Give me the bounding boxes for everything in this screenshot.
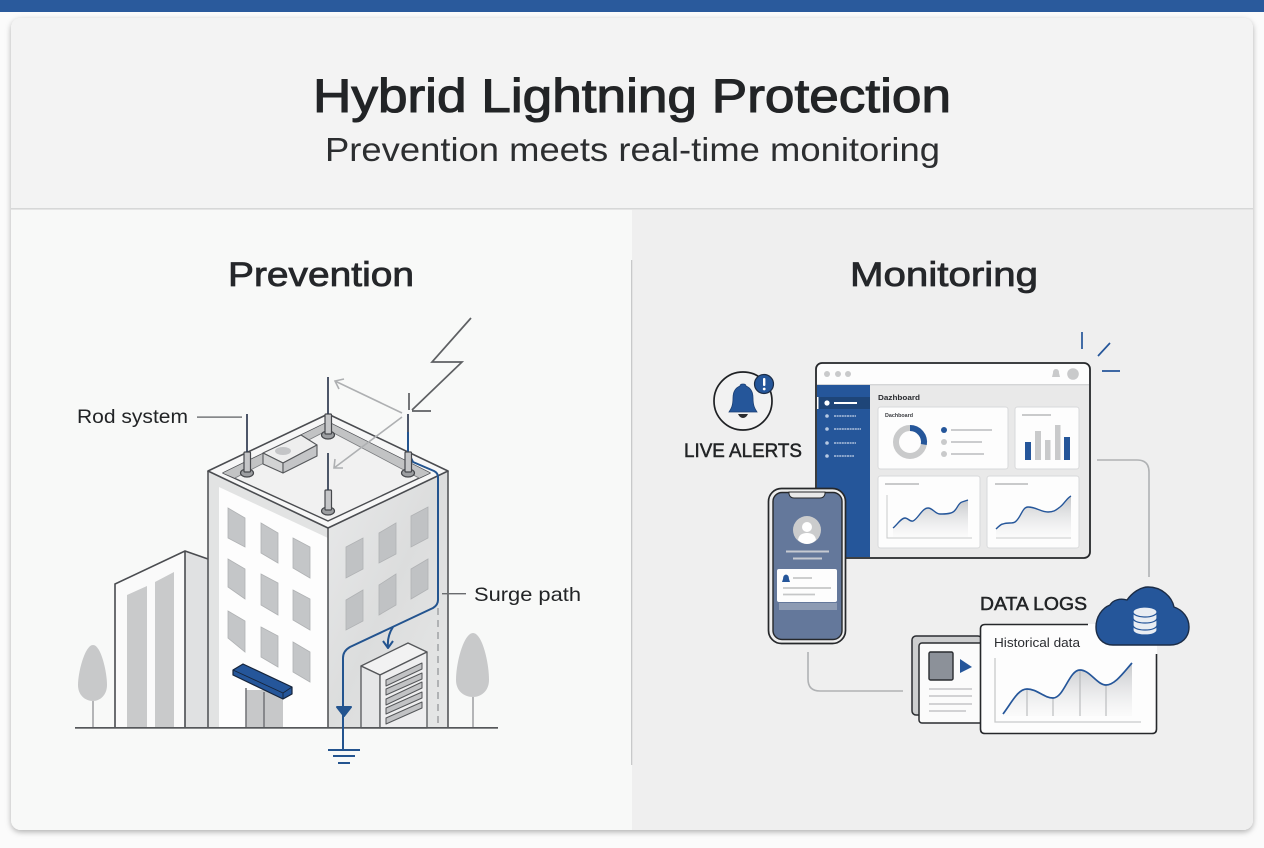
left windows [228,508,310,682]
panel: prevention [12,260,580,830]
dashboard window [816,363,1090,558]
icon: alert bell [714,372,774,430]
avatar [793,516,821,544]
back log sheet [912,636,982,715]
ground symbol [328,750,360,763]
rod [322,453,334,515]
title: Hybrid Lightning Protection [313,69,951,122]
surge path [328,432,438,763]
heading: prevention: Prevention [228,256,414,294]
area chart [995,658,1141,722]
chart card: historical data [980,624,1157,734]
rod [322,377,334,439]
signal ticks [1082,332,1120,371]
connector: dashboard to data logs [1097,460,1149,577]
lightning bolt [409,318,471,411]
left wall [208,471,328,728]
rod with surge connection [402,414,414,477]
deflection arrows [334,379,402,468]
roof [208,414,448,528]
tree right [456,633,489,728]
card: donut summary: Dachboard [885,413,913,419]
main building [208,377,448,728]
wall outlines [208,471,448,728]
phone [768,488,846,644]
right windows [346,507,428,630]
card: bar chart [1015,407,1079,469]
database [1133,607,1157,635]
sidebar [817,385,870,557]
dashed down conductor [437,608,439,728]
hvac unit [361,643,427,728]
awning [233,664,292,699]
header panel [11,77,1253,210]
label: live alerts: LIVE ALERTS [684,441,802,462]
right wall [328,471,448,728]
subtitle: Prevention meets real-time monitoring [325,132,940,169]
icon: database cloud [1096,587,1189,645]
card: line chart two [987,476,1079,548]
chart title: Historical data [994,636,1080,650]
card: donut summary [878,407,1008,469]
label: rod system: Rod system [77,406,188,428]
arrow down [337,707,351,716]
log sheet [919,643,989,723]
top accent bar [0,0,1264,12]
notch [789,492,825,498]
small background building [115,551,208,728]
rod [240,414,254,477]
window dots [824,371,851,377]
panel: monitoring [631,260,1190,765]
notification card [777,569,837,602]
dashboard title: Dazhboard [878,393,920,402]
card: line chart one [878,476,980,548]
roof unit [263,435,317,473]
ground line [75,727,498,729]
heading: monitoring: Monitoring [850,256,1038,294]
label: surge path: Surge path [474,584,581,606]
connector: phone to data logs [808,652,903,691]
branch arrow [383,627,393,648]
label: data logs: DATA LOGS [980,593,1087,614]
label: surge path [442,584,581,606]
tree left [78,645,107,728]
door [246,688,283,728]
top bar icons [1052,368,1079,380]
